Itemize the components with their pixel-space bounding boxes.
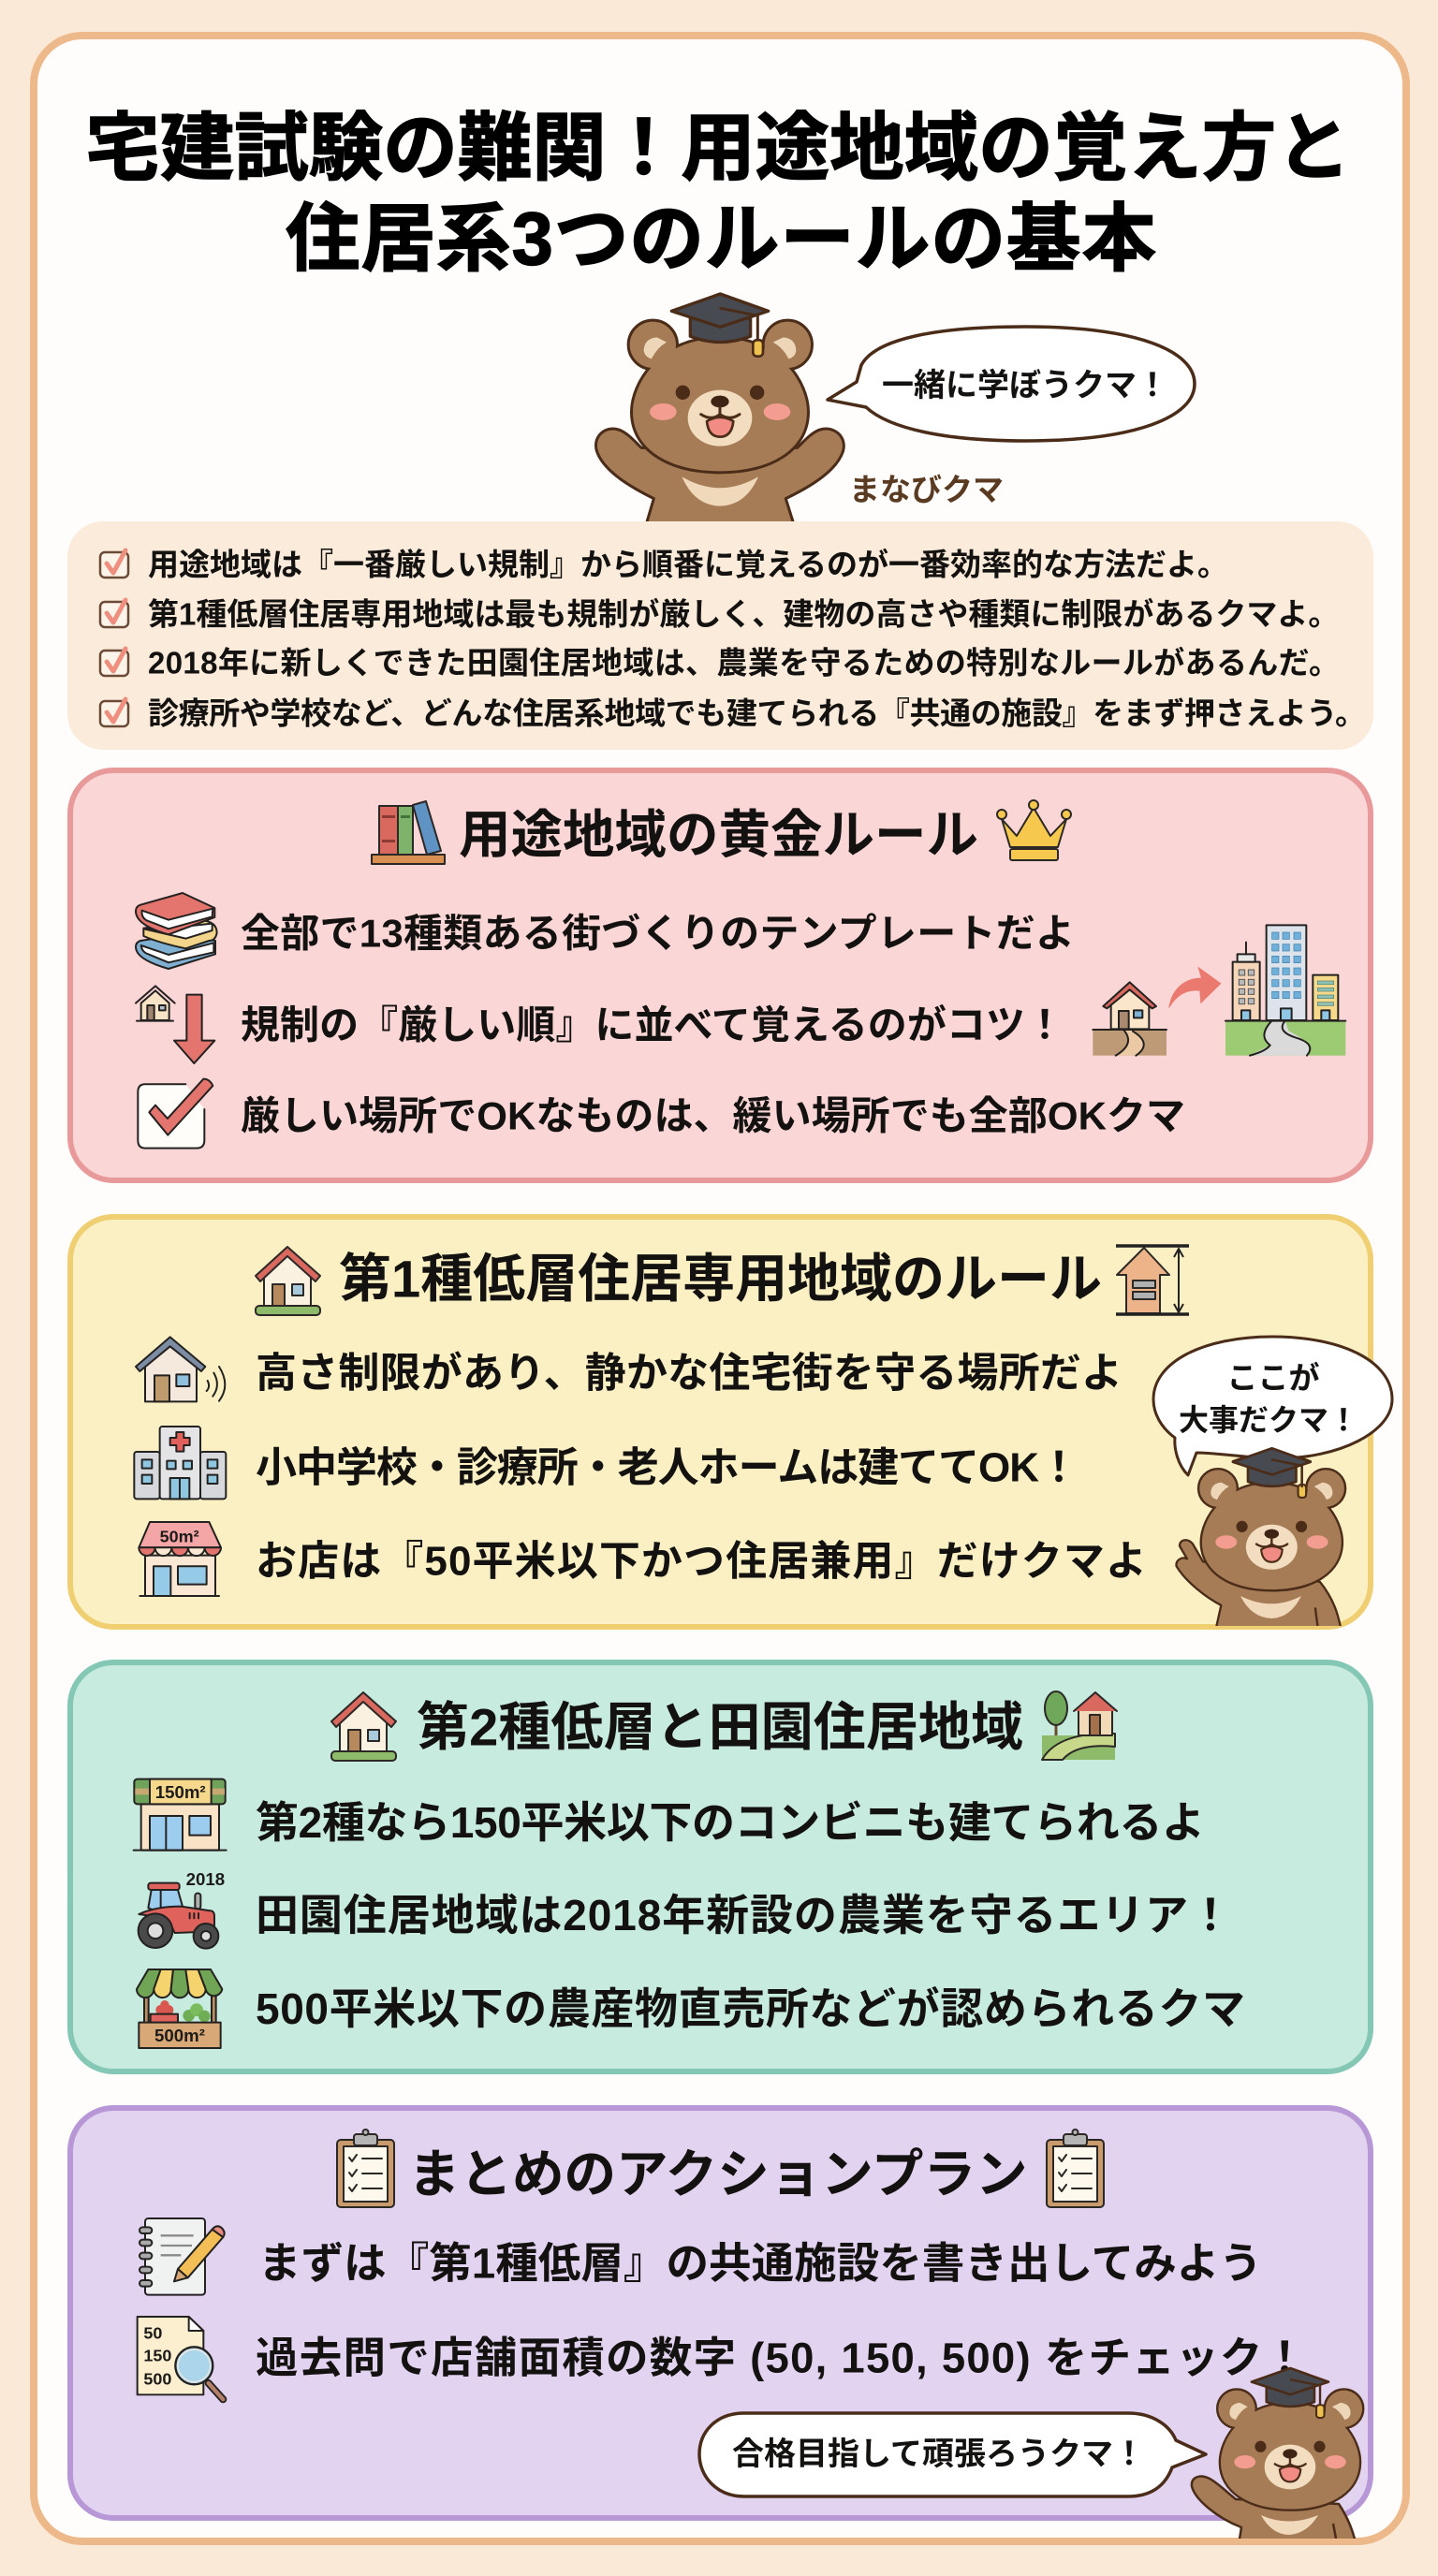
icon: 50 sqm shop: 50m² bbox=[160, 1527, 199, 1545]
icon: books on shelf bbox=[372, 801, 445, 864]
panel: category 2 and rural residential bbox=[70, 1662, 1371, 2071]
redraw of cap over bubble bbox=[1233, 1448, 1311, 1486]
mascot: pointing bear with bubble bbox=[1153, 1337, 1392, 1635]
point 1: 用途地域は『一番厳しい規制』から順番に覚えるのが一番効率的な方法だよ。 bbox=[148, 547, 1228, 582]
rule: shops: お店は『50平米以下かつ住居兼用』だけクマよ bbox=[256, 1539, 1147, 1584]
heading: golden rules: 用途地域の黄金ルール bbox=[459, 806, 978, 864]
speech bubble: 一緒に学ぼうクマ: 一緒に学ぼうクマ！ bbox=[882, 368, 1168, 403]
point 3: 2018年に新しくできた田園住居地域は、農業を守るための特別なルールがあるんだ。 bbox=[148, 646, 1340, 680]
speech bubble: 合格目指して頑張ろうクマ: 合格目指して頑張ろうクマ！ bbox=[732, 2437, 1145, 2472]
speech bubble: ここが大事だクマ: ここが bbox=[1226, 1361, 1320, 1395]
panel: category 1 low-rise rules bbox=[70, 1217, 1371, 1627]
heading: action plan: まとめのアクションプラン bbox=[408, 2145, 1028, 2203]
panel: key points checklist bbox=[67, 521, 1373, 750]
icon: farm stand bbox=[137, 1969, 222, 2048]
mascot name: まなびクマ bbox=[849, 472, 1004, 507]
heading: category 1: 第1種低層住居専用地域のルール bbox=[339, 1249, 1102, 1309]
point 2: 第1種低層住居専用地域は最も規制が厳しく、建物の高さや種類に制限があるクマよ。 bbox=[148, 597, 1339, 631]
icon: stacked books bbox=[136, 893, 217, 969]
icon: crown bbox=[997, 800, 1071, 860]
speech bubble: ここが大事だクマ bbox=[1153, 1337, 1392, 1475]
icon: house bbox=[256, 1247, 320, 1315]
icon: document with magnifier: 50 bbox=[143, 2323, 162, 2342]
icon: clipboard right bbox=[1047, 2130, 1104, 2207]
icon: tractor 2018 bbox=[139, 1869, 225, 1949]
action 1: まずは『第1種低層』の共通施設を書き出してみよう bbox=[258, 2239, 1262, 2288]
icon: convenience store bbox=[134, 1779, 227, 1851]
mascot: waving bear with bubble bbox=[699, 2368, 1362, 2551]
icon: notebook and pencil bbox=[139, 2218, 225, 2295]
point 4: 診療所や学校など、どんな住居系地域でも建てられる『共通の施設』をまず押さえよう。 bbox=[148, 696, 1366, 730]
icon: farm house bbox=[1042, 1691, 1117, 1760]
speech bubble: 一緒に学ぼうクマ bbox=[828, 327, 1195, 441]
icon: convenience store: 150m² bbox=[155, 1782, 206, 1802]
rule: convenience store: 第2種なら150平米以下のコンビニも建てられるよ bbox=[256, 1798, 1205, 1847]
icon: house and down arrow bbox=[136, 986, 214, 1063]
rule: rural zone: 田園住居地域は2018年新設の農業を守るエリア！ bbox=[256, 1891, 1232, 1939]
title: 住居系3つのルールの基本 bbox=[286, 197, 1156, 281]
heading: category 2: 第2種低層と田園住居地域 bbox=[417, 1698, 1023, 1756]
rule 3: 厳しい場所でOKなものは、緩い場所でも全部OKクマ bbox=[241, 1093, 1185, 1138]
icon: tractor 2018: 2018 bbox=[186, 1869, 225, 1889]
icon: document with magnifier bbox=[138, 2317, 223, 2399]
rule: allowed facilities: 小中学校・診療所・老人ホームは建ててOK！ bbox=[256, 1445, 1079, 1490]
icon: house to city bbox=[1093, 925, 1345, 1056]
panel: action plan bbox=[70, 2108, 1371, 2518]
icon: document with magnifier: 500 bbox=[143, 2369, 171, 2388]
icon: check box bbox=[138, 1079, 213, 1149]
action 2: 過去問で店舗面積の数字 (50, 150, 500) をチェック！ bbox=[256, 2334, 1306, 2381]
rule: height: 高さ制限があり、静かな住宅街を守る場所だよ bbox=[256, 1350, 1123, 1397]
icon: document with magnifier: 150 bbox=[143, 2347, 171, 2365]
rule 2: 規制の『厳しい順』に並べて覚えるのがコツ！ bbox=[241, 1003, 1064, 1046]
rule 1: 全部で13種類ある街づくりのテンプレートだよ bbox=[241, 912, 1075, 955]
icon: quiet house bbox=[136, 1337, 225, 1401]
mascot: manabi bear bbox=[595, 294, 844, 531]
icon: farm stand: 500m² bbox=[154, 2026, 205, 2045]
icon: hospital bbox=[134, 1427, 226, 1499]
speech bubble: ここが大事だクマ: 大事だクマ！ bbox=[1179, 1403, 1358, 1437]
rule: direct sales: 500平米以下の農産物直売所などが認められるクマ bbox=[256, 1984, 1245, 2033]
title: 宅建試験の難関！用途地域の覚え方と bbox=[85, 107, 1351, 189]
icon: house bbox=[331, 1692, 396, 1761]
icon: height limit bbox=[1116, 1246, 1189, 1314]
speech bubble: 合格目指して頑張ろうクマ bbox=[699, 2413, 1206, 2496]
title bbox=[85, 107, 1351, 281]
panel: golden rules bbox=[70, 770, 1371, 1180]
icon: clipboard left bbox=[337, 2130, 394, 2207]
icon: 50 sqm shop bbox=[139, 1522, 221, 1596]
